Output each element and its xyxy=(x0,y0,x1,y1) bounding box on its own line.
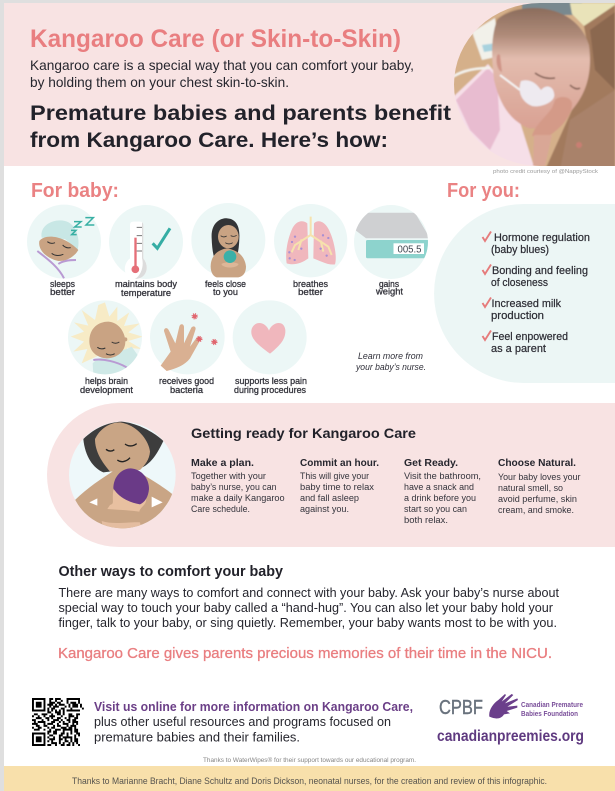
tip: make a plan: Make a plan. xyxy=(191,457,254,469)
benefit list: (baby blues) xyxy=(491,244,549,256)
benefit list xyxy=(491,232,590,355)
tip: commit an hour: Commit an hour. xyxy=(300,457,379,469)
note: learn more xyxy=(355,351,426,372)
label: supports less pain: during procedures xyxy=(234,385,306,395)
benefit list: Feel enpowered xyxy=(492,331,568,343)
photo: premature baby on parent's chest xyxy=(445,0,615,170)
title: Kangaroo Care (or Skin-to-Skin) xyxy=(30,25,401,53)
tip: make a plan xyxy=(191,457,285,514)
tip: commit an hour: and fall asleep xyxy=(300,493,359,503)
label: maintains body temperature: temperature xyxy=(121,288,171,298)
label: helps brain development: helps brain xyxy=(85,376,128,386)
label: feels close to you: to you xyxy=(213,287,238,297)
heading: getting ready: Getting ready for Kangaroo Care xyxy=(191,425,416,441)
intro text: by holding them on your chest skin-to-skin. xyxy=(30,74,289,90)
benefits heading xyxy=(30,101,451,152)
label: helps brain development: development xyxy=(80,385,134,395)
heading: for you: For you: xyxy=(447,179,520,202)
logo: CPBF xyxy=(439,694,583,719)
intro text: Kangaroo care is a special way that you can comfort your baby, xyxy=(30,57,414,73)
label: breathes better: better xyxy=(298,287,323,297)
tip: make a plan: Together with your xyxy=(191,471,266,481)
label: gains weight xyxy=(375,279,404,296)
label: feels close to you xyxy=(205,279,246,297)
tip: choose natural: avoid perfume, skin xyxy=(498,494,577,504)
icon: thermometer with check xyxy=(109,205,183,279)
checks xyxy=(482,232,491,340)
icon: scale: 005.5 xyxy=(398,244,422,256)
icon: feels close xyxy=(191,203,265,277)
illustration: parent holding baby xyxy=(69,422,176,530)
label: maintains body temperature xyxy=(115,279,177,298)
label: supports less pain: supports less pain xyxy=(235,376,307,386)
text: visit us online: Visit us online for more information on Kangaroo Care, xyxy=(94,699,413,714)
label: sleeps better xyxy=(50,279,75,297)
text: visit us online: premature babies and their families. xyxy=(94,730,300,744)
icon: sleeps better xyxy=(27,205,101,279)
logo: CPBF: Babies Foundation xyxy=(521,709,578,718)
benefits heading: from Kangaroo Care. Here’s how: xyxy=(30,128,388,152)
tip: commit an hour xyxy=(300,457,379,514)
label: helps brain development xyxy=(80,376,134,395)
tip: get ready: Visit the bathroom, xyxy=(404,471,481,481)
website: canadianpreemies.org xyxy=(437,728,584,745)
tip: get ready xyxy=(404,457,481,525)
label: supports less pain xyxy=(234,376,307,395)
text: other ways body xyxy=(58,585,559,630)
tip: get ready: a drink before you xyxy=(404,493,476,503)
tip: get ready: have a snack and xyxy=(404,482,474,492)
callout: precious memories: Kangaroo Care gives parents precious memories of their time in the NICU. xyxy=(58,646,552,662)
label: feels close to you: feels close xyxy=(205,279,246,289)
logo: CPBF: Canadian Premature xyxy=(521,700,583,709)
panel: getting ready xyxy=(47,403,615,547)
text: visit us online xyxy=(94,699,413,744)
tip: choose natural: cream, and smoke. xyxy=(498,505,574,515)
QR code xyxy=(32,699,84,745)
tip: choose natural: Your baby loves your xyxy=(498,472,580,482)
icon: scale xyxy=(354,205,428,279)
tip: choose natural: Choose Natural. xyxy=(498,457,576,469)
note: learn more: your baby’s nurse. xyxy=(355,362,426,372)
tip: make a plan: baby’s nurse, you can xyxy=(191,482,276,492)
tip: commit an hour: This will give your xyxy=(300,471,369,481)
label: receives good bacteria: receives good xyxy=(159,376,214,386)
intro text xyxy=(30,57,414,90)
label: receives good bacteria xyxy=(159,376,214,395)
benefits heading: Premature babies and parents benefit xyxy=(30,101,451,125)
photo credit: photo credit courtesy of @NappyStock xyxy=(493,169,598,175)
panel: for you benefits xyxy=(434,204,615,383)
tip: make a plan: Care schedule. xyxy=(191,504,250,514)
icon: hand with bacteria xyxy=(150,300,225,374)
tip: get ready: both relax. xyxy=(404,515,448,525)
text: other ways body: special way to touch your baby called a “hand-hug”. You can also let your baby hold your xyxy=(58,600,554,615)
heading: other ways: Other ways to comfort your baby xyxy=(58,564,283,580)
text: visit us online: plus other useful resources and programs focused on xyxy=(94,714,391,729)
sponsor thanks: Thanks to WaterWipes® for their support towards our educational program. xyxy=(203,756,416,764)
tip: get ready: Get Ready. xyxy=(404,457,458,469)
label: sleeps better: sleeps xyxy=(50,279,75,289)
benefit list: Hormone regulation xyxy=(494,232,590,244)
label: sleeps better: better xyxy=(50,287,75,297)
tip: get ready: start so you can xyxy=(404,504,467,514)
icon: brain development xyxy=(68,300,143,375)
note: learn more: Learn more from xyxy=(358,351,423,361)
tip: choose natural xyxy=(498,457,580,515)
footer band xyxy=(4,766,615,791)
header band xyxy=(4,3,615,166)
benefit list: Increased milk xyxy=(492,298,561,310)
benefit list: production xyxy=(491,310,544,322)
benefit list: of closeness xyxy=(491,277,548,289)
label: breathes better: breathes xyxy=(293,279,328,289)
label: breathes better xyxy=(293,279,328,297)
logo: CPBF: CPBF xyxy=(439,697,483,719)
tip: commit an hour: against you. xyxy=(300,504,349,514)
label: maintains body temperature: maintains body xyxy=(115,279,177,289)
footer band: Thanks to Marianne Bracht, Diane Schultz and Doris Dickson, neonatal nurses, for the creation and review of this infographic. xyxy=(72,776,547,787)
benefit list: Bonding and feeling xyxy=(492,265,588,277)
icon: lungs xyxy=(274,204,347,277)
tip: commit an hour: baby time to relax xyxy=(300,482,375,492)
label: gains weight: gains xyxy=(379,279,399,289)
text: other ways body: finger, talk to your baby, or sing quietly. Remember, your baby wants most to be with you. xyxy=(58,615,557,630)
heading: for baby: For baby: xyxy=(31,179,119,202)
icon: heart xyxy=(233,300,307,374)
tip: make a plan: make a daily Kangaroo xyxy=(191,493,285,503)
label: receives good bacteria: bacteria xyxy=(170,385,203,395)
benefit list: as a parent xyxy=(491,343,546,355)
text: other ways body: There are many ways to comfort and connect with your baby. Ask your baby’s nurse about xyxy=(58,585,559,600)
tip: choose natural: natural smell, so xyxy=(498,483,563,493)
icon: purple hand xyxy=(489,694,518,718)
label: gains weight: weight xyxy=(375,286,404,296)
